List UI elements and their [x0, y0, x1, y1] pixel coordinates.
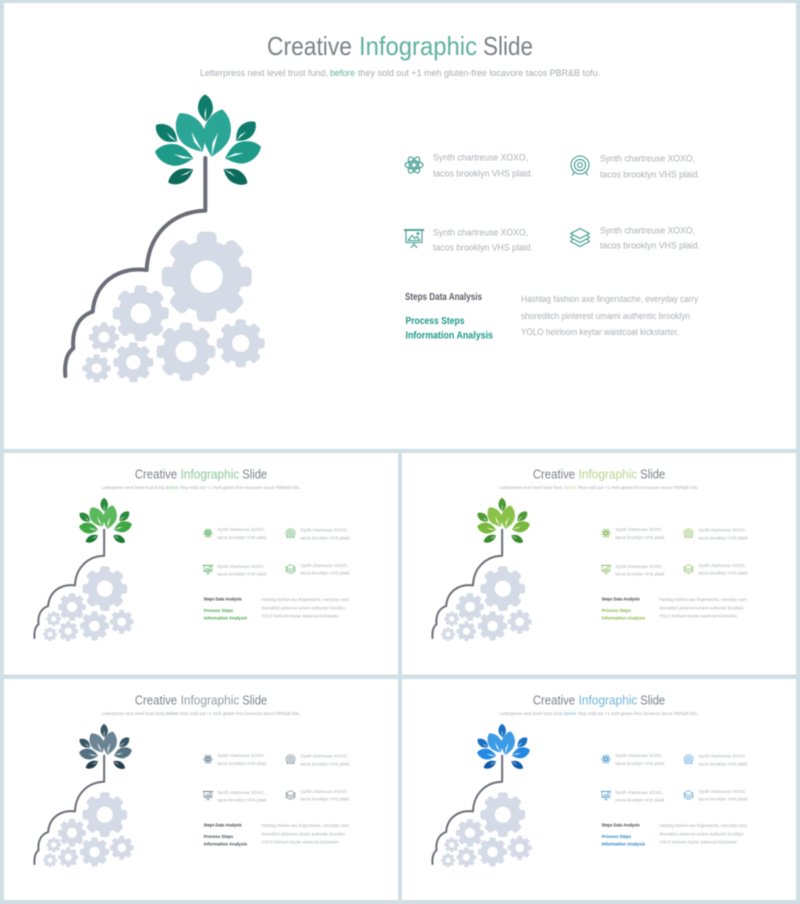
feature text 3: tacos brooklyn VHS plaid.	[217, 572, 267, 578]
title: Creative	[533, 466, 575, 481]
feature text 3	[615, 790, 665, 804]
icon: target	[286, 755, 295, 764]
heading: process steps: Information Analysis	[204, 841, 247, 847]
feature text 1: tacos brooklyn VHS plaid.	[615, 535, 665, 541]
icon: presentation board	[404, 230, 424, 248]
subtitle	[500, 485, 698, 491]
title	[135, 692, 267, 707]
heading: process steps: Information Analysis	[602, 841, 645, 847]
subtitle: Letterpress next level trust fund,	[500, 711, 563, 717]
leaf crown	[475, 724, 531, 771]
icon: atom	[601, 754, 610, 764]
title	[533, 692, 665, 707]
feature text 2	[698, 753, 748, 767]
title: Infographic	[579, 692, 638, 707]
feature text 1	[217, 527, 267, 541]
paragraph: Hashtag fashion axe fingerstache, everyday carry	[261, 597, 350, 603]
feature text 3: tacos brooklyn VHS plaid.	[433, 242, 533, 254]
subtitle: before	[166, 485, 179, 491]
title: Infographic	[181, 692, 240, 707]
heading: steps data analysis: Steps Data Analysis	[601, 822, 640, 828]
feature text 3: Synth chartreuse XOXO,	[217, 790, 265, 796]
heading: steps data analysis: Steps Data Analysis	[203, 596, 242, 602]
icon: presentation board	[203, 565, 213, 574]
feature text 4: Synth chartreuse XOXO,	[699, 789, 746, 795]
paragraph: YOLO heirloom keytar waistcoat kickstarter.	[521, 327, 679, 338]
stem outline	[34, 756, 104, 864]
icon: layers	[570, 228, 590, 246]
icon: atom	[405, 155, 423, 175]
title: Slide	[640, 692, 665, 707]
title: Creative	[135, 466, 177, 481]
icon: layers	[286, 565, 295, 574]
feature text 3: Synth chartreuse XOXO,	[615, 564, 663, 570]
subtitle: Letterpress next level trust fund,	[102, 485, 165, 491]
feature text 1	[615, 753, 665, 767]
icon: atom	[601, 528, 610, 538]
feature text 3	[433, 228, 533, 254]
gears cluster	[441, 792, 532, 867]
feature text 4	[300, 563, 350, 577]
title	[533, 466, 665, 481]
heading: process steps	[406, 316, 493, 342]
feature text 3: tacos brooklyn VHS plaid.	[217, 798, 267, 804]
feature text 2: Synth chartreuse XOXO,	[699, 527, 746, 533]
title: Slide	[483, 31, 533, 61]
feature text 4: Synth chartreuse XOXO,	[699, 563, 746, 569]
leaf crown	[151, 94, 264, 189]
title: Slide	[242, 692, 267, 707]
feature text 3	[217, 564, 267, 578]
feature text 3: Synth chartreuse XOXO,	[433, 228, 528, 238]
feature text 4: tacos brooklyn VHS plaid.	[301, 797, 350, 803]
feature text 1	[615, 527, 665, 541]
paragraph: shoreditch pinterest umami authentic brooklyn	[261, 832, 346, 838]
leaf crown	[475, 498, 531, 545]
paragraph: YOLO heirloom keytar waistcoat kickstarter.	[261, 614, 340, 620]
feature text 3: tacos brooklyn VHS plaid.	[615, 798, 665, 804]
feature text 2: tacos brooklyn VHS plaid.	[699, 535, 748, 541]
stem outline	[432, 530, 502, 638]
feature text 2: Synth chartreuse XOXO,	[301, 527, 348, 533]
paragraph: Hashtag fashion axe fingerstache, everyday carry	[521, 294, 698, 305]
feature text 2	[300, 527, 350, 541]
heading: process steps: Information Analysis	[406, 330, 493, 342]
title: Slide	[640, 466, 665, 481]
icon: layers	[286, 791, 295, 800]
subtitle	[200, 68, 600, 79]
gears cluster	[441, 566, 532, 641]
subtitle	[500, 711, 698, 717]
feature text 2: tacos brooklyn VHS plaid.	[301, 535, 350, 541]
feature text 4	[300, 789, 350, 803]
stem outline	[432, 756, 502, 864]
icon: presentation board	[601, 791, 611, 800]
paragraph: Hashtag fashion axe fingerstache, everyday carry	[659, 823, 748, 829]
heading: process steps: Information Analysis	[602, 615, 645, 621]
subtitle: they sold out +1 meh gluten-free locavore tacos PBR&B tofu.	[578, 711, 699, 717]
feature text 1: tacos brooklyn VHS plaid.	[217, 761, 267, 767]
paragraph: shoreditch pinterest umami authentic brooklyn	[521, 311, 690, 322]
title: Infographic	[359, 31, 477, 61]
heading: process steps: Process Steps	[204, 608, 233, 614]
panel: green slide	[4, 453, 398, 674]
panel: slate slide	[4, 679, 398, 900]
heading: steps data analysis: Steps Data Analysis	[405, 292, 482, 303]
subtitle	[102, 485, 300, 491]
paragraph	[659, 597, 748, 620]
subtitle: before	[166, 711, 179, 717]
feature text 1: Synth chartreuse XOXO,	[615, 527, 663, 533]
title: Creative	[267, 31, 352, 61]
feature text 4: tacos brooklyn VHS plaid.	[301, 571, 350, 577]
title: Infographic	[579, 466, 638, 481]
icon: atom	[203, 754, 212, 764]
subtitle: before	[330, 68, 355, 79]
feature text 4: Synth chartreuse XOXO,	[600, 226, 695, 236]
gears cluster	[43, 792, 134, 867]
subtitle: before	[564, 711, 577, 717]
feature text 2	[698, 527, 748, 541]
heading: process steps	[602, 608, 645, 621]
paragraph	[659, 823, 748, 846]
subtitle: they sold out +1 meh gluten-free locavore tacos PBR&B tofu.	[180, 485, 301, 491]
feature text 4	[698, 789, 748, 803]
feature text 2: tacos brooklyn VHS plaid.	[600, 170, 700, 180]
subtitle: Letterpress next level trust fund,	[102, 711, 165, 717]
feature text 2	[600, 154, 700, 180]
leaf crown	[77, 724, 133, 771]
feature text 1	[433, 152, 533, 180]
title: Creative	[135, 692, 177, 707]
leaf crown	[77, 498, 133, 545]
feature text 4: Synth chartreuse XOXO,	[301, 789, 348, 795]
feature text 2: tacos brooklyn VHS plaid.	[301, 761, 350, 767]
subtitle: before	[564, 485, 577, 491]
feature text 3	[217, 790, 267, 804]
feature text 4: tacos brooklyn VHS plaid.	[600, 240, 700, 252]
heading: process steps	[204, 608, 247, 621]
icon: target	[286, 529, 295, 538]
subtitle: Letterpress next level trust fund,	[500, 485, 563, 491]
icon: presentation board	[203, 791, 213, 800]
icon: layers	[684, 565, 693, 574]
gears cluster	[43, 566, 134, 641]
title	[267, 31, 533, 61]
feature text 1: tacos brooklyn VHS plaid.	[433, 168, 533, 180]
paragraph	[261, 823, 350, 846]
heading: process steps: Information Analysis	[204, 615, 247, 621]
feature text 2: Synth chartreuse XOXO,	[301, 753, 348, 759]
paragraph: Hashtag fashion axe fingerstache, everyday carry	[261, 823, 350, 829]
heading: process steps	[204, 834, 247, 847]
feature text 2: Synth chartreuse XOXO,	[699, 753, 746, 759]
paragraph: Hashtag fashion axe fingerstache, everyday carry	[659, 597, 748, 603]
subtitle: Letterpress next level trust fund,	[200, 68, 328, 79]
paragraph: shoreditch pinterest umami authentic brooklyn	[659, 606, 744, 612]
icon: presentation board	[601, 565, 611, 574]
feature text 3: Synth chartreuse XOXO,	[217, 564, 265, 570]
icon: atom	[203, 528, 212, 538]
heading: process steps: Process Steps	[602, 608, 631, 614]
feature text 1: tacos brooklyn VHS plaid.	[217, 535, 267, 541]
gears cluster	[83, 232, 265, 382]
subtitle: they sold out +1 meh gluten-free locavore tacos PBR&B tofu.	[180, 711, 301, 717]
feature text 4: tacos brooklyn VHS plaid.	[699, 571, 748, 577]
feature text 4: Synth chartreuse XOXO,	[301, 563, 348, 569]
subtitle	[102, 711, 300, 717]
feature text 3	[615, 564, 665, 578]
icon: layers	[684, 791, 693, 800]
feature text 3: tacos brooklyn VHS plaid.	[615, 572, 665, 578]
feature text 1: Synth chartreuse XOXO,	[217, 753, 265, 759]
heading: process steps: Process Steps	[204, 834, 233, 840]
feature text 1: Synth chartreuse XOXO,	[433, 152, 528, 164]
paragraph: YOLO heirloom keytar waistcoat kickstarter.	[659, 614, 738, 620]
paragraph: shoreditch pinterest umami authentic brooklyn	[659, 832, 744, 838]
paragraph	[521, 294, 698, 338]
stem outline	[34, 530, 104, 638]
paragraph: shoreditch pinterest umami authentic brooklyn	[261, 606, 346, 612]
paragraph: YOLO heirloom keytar waistcoat kickstarter.	[659, 840, 738, 846]
heading: steps data analysis: Steps Data Analysis	[601, 596, 640, 602]
icon: target	[684, 755, 693, 764]
feature text 1	[217, 753, 267, 767]
subtitle: they sold out +1 meh gluten-free locavore tacos PBR&B tofu.	[578, 485, 699, 491]
heading: process steps: Process Steps	[406, 316, 465, 327]
feature text 4: tacos brooklyn VHS plaid.	[699, 797, 748, 803]
title: Slide	[242, 466, 267, 481]
title: Creative	[533, 692, 575, 707]
feature text 4	[698, 563, 748, 577]
feature text 2: Synth chartreuse XOXO,	[600, 154, 695, 164]
stem outline	[65, 158, 205, 376]
icon: target	[684, 529, 693, 538]
panel: blue slide	[402, 679, 796, 900]
title	[135, 466, 267, 481]
panel: main teal slide	[4, 3, 796, 449]
subtitle: they sold out +1 meh gluten-free locavore tacos PBR&B tofu.	[358, 68, 600, 79]
title: Infographic	[181, 466, 240, 481]
feature text 2	[300, 753, 350, 767]
feature text 4	[600, 226, 700, 252]
feature text 2: tacos brooklyn VHS plaid.	[699, 761, 748, 767]
feature text 1: Synth chartreuse XOXO,	[615, 753, 663, 759]
paragraph	[261, 597, 350, 620]
paragraph: YOLO heirloom keytar waistcoat kickstarter.	[261, 840, 340, 846]
icon: target	[571, 156, 589, 175]
heading: process steps: Process Steps	[602, 834, 631, 840]
heading: steps data analysis: Steps Data Analysis	[203, 822, 242, 828]
heading: process steps	[602, 834, 645, 847]
feature text 1: Synth chartreuse XOXO,	[217, 527, 265, 533]
feature text 3: Synth chartreuse XOXO,	[615, 790, 663, 796]
panel: lime slide	[402, 453, 796, 674]
feature text 1: tacos brooklyn VHS plaid.	[615, 761, 665, 767]
